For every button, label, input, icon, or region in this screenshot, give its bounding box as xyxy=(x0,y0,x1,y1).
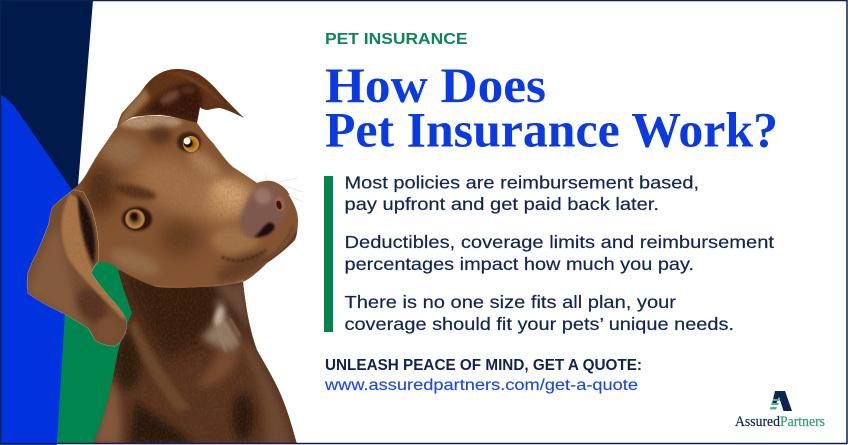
text block: reimbursement: Most policies are reimbursement based, xyxy=(344,172,699,192)
dog left ear xyxy=(26,190,127,346)
dog body and neck xyxy=(94,270,297,443)
dog right eye xyxy=(177,132,201,152)
main title: How Does xyxy=(325,57,546,113)
logo wordmark: AssuredPartners xyxy=(735,414,825,430)
navy background shape xyxy=(0,0,93,192)
call to action: UNLEASH PEACE OF MIND, GET A QUOTE: xyxy=(325,357,642,374)
text block: reimbursement xyxy=(344,172,699,214)
dog left eye xyxy=(122,207,152,231)
website link: www.assuredpartners.com/get-a-quote xyxy=(324,377,638,394)
text block: no one size: There is no one size fits all plan, your xyxy=(344,292,676,312)
blue curved shape xyxy=(0,94,90,445)
dog nose xyxy=(240,183,288,238)
main title: Pet Insurance Work? xyxy=(325,102,778,158)
dog whiskers xyxy=(266,175,303,202)
text block: deductibles xyxy=(344,232,774,274)
dog head xyxy=(72,116,298,288)
eyebrow heading: pet insurance: PET INSURANCE xyxy=(325,31,468,48)
white chest patch xyxy=(200,298,240,352)
logo: Assured Partners xyxy=(735,391,825,430)
dog top ear xyxy=(117,69,244,127)
main title xyxy=(325,57,778,158)
logo mark xyxy=(770,391,792,411)
text block: no one size: coverage should fit your pets’ unique needs. xyxy=(344,314,734,334)
dog illustration xyxy=(20,60,305,445)
green accent bar xyxy=(324,176,333,332)
text block: deductibles: percentages impact how much you pay. xyxy=(344,254,694,274)
text block: deductibles: Deductibles, coverage limits and reimbursement xyxy=(344,232,774,252)
green curved shape xyxy=(57,258,137,444)
text block: reimbursement: pay upfront and get paid back later. xyxy=(344,194,659,214)
text block: no one size xyxy=(344,292,734,334)
